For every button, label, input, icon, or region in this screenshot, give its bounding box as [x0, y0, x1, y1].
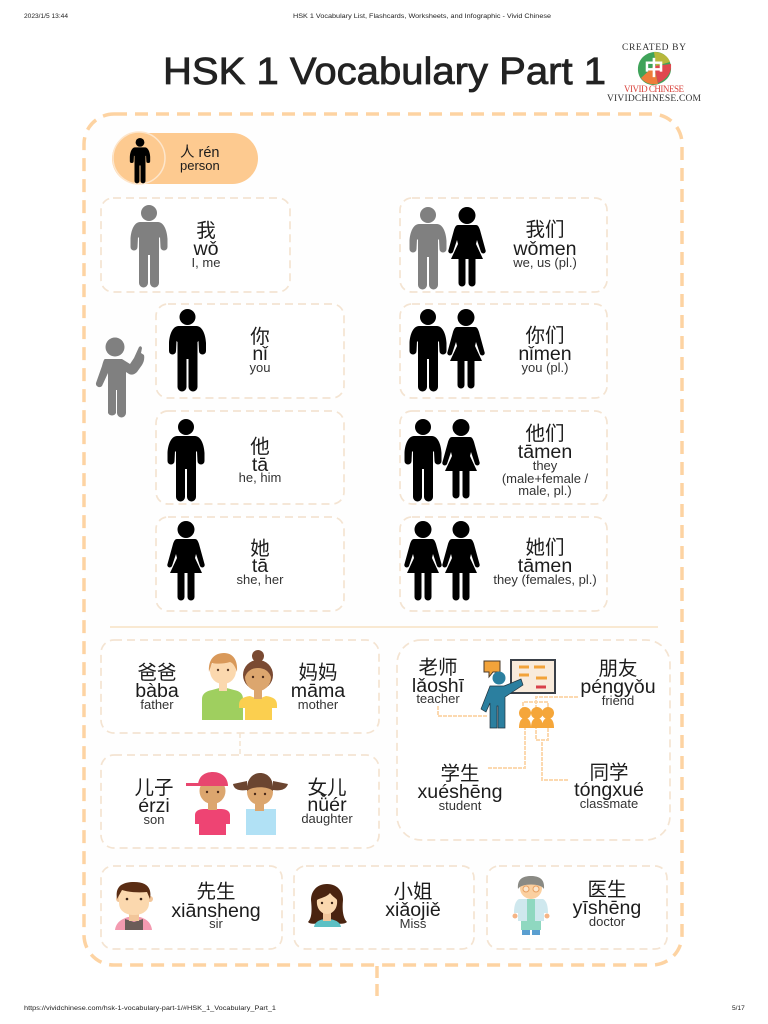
card: tamen male: tāmen — [518, 441, 572, 463]
card: ni: nǐ — [252, 343, 269, 365]
card: sir: xiānsheng — [171, 900, 261, 922]
card: tamen male — [400, 411, 607, 504]
card: sir: 先生 — [196, 881, 236, 903]
logo: Vivid Chinese — [607, 43, 702, 104]
page footer: page number: 5/17 — [732, 1005, 745, 1012]
card: sir — [101, 866, 282, 949]
card: miss — [294, 866, 474, 949]
category pill: person: 人 rén — [180, 144, 220, 161]
card: nimen: you (pl.) — [522, 360, 568, 375]
page footer: url: https://vividchinese.com/hsk-1-vocabulary-part-1/#HSK_1_Vocabulary_Part_1 — [24, 1005, 276, 1012]
icon: doctor — [512, 876, 550, 935]
card: ta he — [156, 411, 344, 504]
connector below frame — [375, 966, 379, 998]
card: wo: I, me — [192, 255, 220, 270]
panel: outer dashed frame — [84, 114, 682, 965]
card: tamen female: 她们 — [525, 537, 565, 559]
card: ta he: 他 — [250, 436, 270, 458]
card: ta she — [156, 517, 344, 611]
icon: son and daughter — [186, 772, 288, 835]
card: parents — [101, 640, 379, 733]
logo: Vivid Chinese: VIVID CHINESE — [624, 84, 684, 94]
card: miss: xiǎojiě — [385, 899, 441, 921]
card: doctor: 医生 — [587, 879, 627, 901]
icon: students — [519, 707, 554, 728]
icon: teacher at board — [481, 660, 555, 728]
card: children: son — [144, 812, 164, 827]
icon: man bust — [115, 882, 153, 930]
card: school relations: 同学 — [589, 762, 629, 784]
title: HSK 1 Vocabulary Part 1 — [163, 51, 606, 93]
card: children — [101, 755, 379, 848]
card: school relations: 朋友 — [598, 658, 638, 680]
card: doctor — [487, 866, 667, 949]
card: school relations — [397, 640, 670, 840]
card: wo: 我 — [196, 220, 216, 242]
card: tamen female — [400, 517, 607, 611]
card: school relations: tóngxué — [574, 779, 644, 801]
icon: father and mother — [202, 650, 277, 720]
category pill: person — [112, 132, 258, 184]
card: doctor: yīshēng — [573, 897, 641, 919]
card: parents: bàba — [135, 680, 179, 702]
page header: document title: HSK 1 Vocabulary List, Flashcards, Worksheets, and Infographic - Vivid Chinese — [293, 13, 551, 20]
card: women — [400, 198, 607, 292]
card: ni: you — [250, 360, 270, 375]
card: wo — [101, 198, 290, 292]
card: ni: 你 — [250, 326, 270, 348]
card: doctor: doctor — [589, 914, 626, 929]
card: miss: Miss — [400, 916, 427, 931]
icon: woman bust — [308, 884, 347, 927]
card: tamen male: 他们 — [525, 423, 565, 445]
card: sir: sir — [209, 916, 224, 931]
card: school relations: péngyǒu — [580, 676, 656, 698]
card: women: wǒmen — [512, 238, 577, 260]
card: nimen: nǐmen — [518, 343, 572, 365]
card: school relations: lǎoshī — [412, 675, 465, 697]
page header: date: 2023/1/5 13:44 — [24, 13, 68, 20]
card: tamen female: they (females, pl.) — [493, 572, 597, 587]
card: tamen male: they — [533, 458, 558, 473]
card: school relations: 学生 — [440, 763, 480, 785]
card: school relations: 老师 — [418, 657, 458, 679]
card: women: 我们 — [525, 219, 565, 241]
card: tamen female: tāmen — [518, 555, 572, 577]
card: ta he: he, him — [239, 470, 281, 485]
card: parents: 爸爸 — [137, 662, 177, 684]
card: parents: father — [140, 697, 174, 712]
card: school relations: classmate — [580, 796, 638, 811]
card: ta she: 她 — [250, 538, 270, 560]
icon: pointing person — [96, 338, 144, 418]
card: school relations: student — [439, 798, 482, 813]
logo: Vivid Chinese: VIVIDCHINESE.COM — [607, 94, 702, 104]
category pill: person: person — [180, 158, 220, 173]
card: children: érzi — [138, 795, 170, 817]
card: school relations: xuéshēng — [418, 781, 502, 803]
card: nimen: 你们 — [525, 325, 565, 347]
card: school relations: friend — [602, 693, 634, 708]
card: ni — [156, 304, 344, 398]
logo: Vivid Chinese: 中 — [644, 57, 664, 80]
card: parents: mother — [298, 697, 339, 712]
card: miss: 小姐 — [393, 881, 433, 903]
card: wo: wǒ — [192, 238, 219, 260]
card: ta she: tā — [252, 555, 268, 577]
card: school relations: teacher — [416, 691, 460, 706]
card: children: daughter — [301, 811, 353, 826]
card: women: we, us (pl.) — [512, 255, 577, 270]
logo: Vivid Chinese: CREATED BY — [622, 43, 686, 53]
card: children: 儿子 — [134, 777, 174, 799]
card: parents: 妈妈 — [298, 662, 338, 684]
connectors — [438, 697, 578, 780]
card: ta she: she, her — [237, 572, 284, 587]
card: tamen male: (male+female / — [502, 471, 589, 486]
card: parents: māma — [291, 680, 345, 702]
card: nimen — [400, 304, 607, 398]
card: ta he: tā — [252, 454, 268, 476]
card: tamen male: male, pl.) — [518, 483, 572, 498]
card: children: 女儿 — [307, 777, 347, 799]
card: children: nǚér — [307, 793, 347, 816]
